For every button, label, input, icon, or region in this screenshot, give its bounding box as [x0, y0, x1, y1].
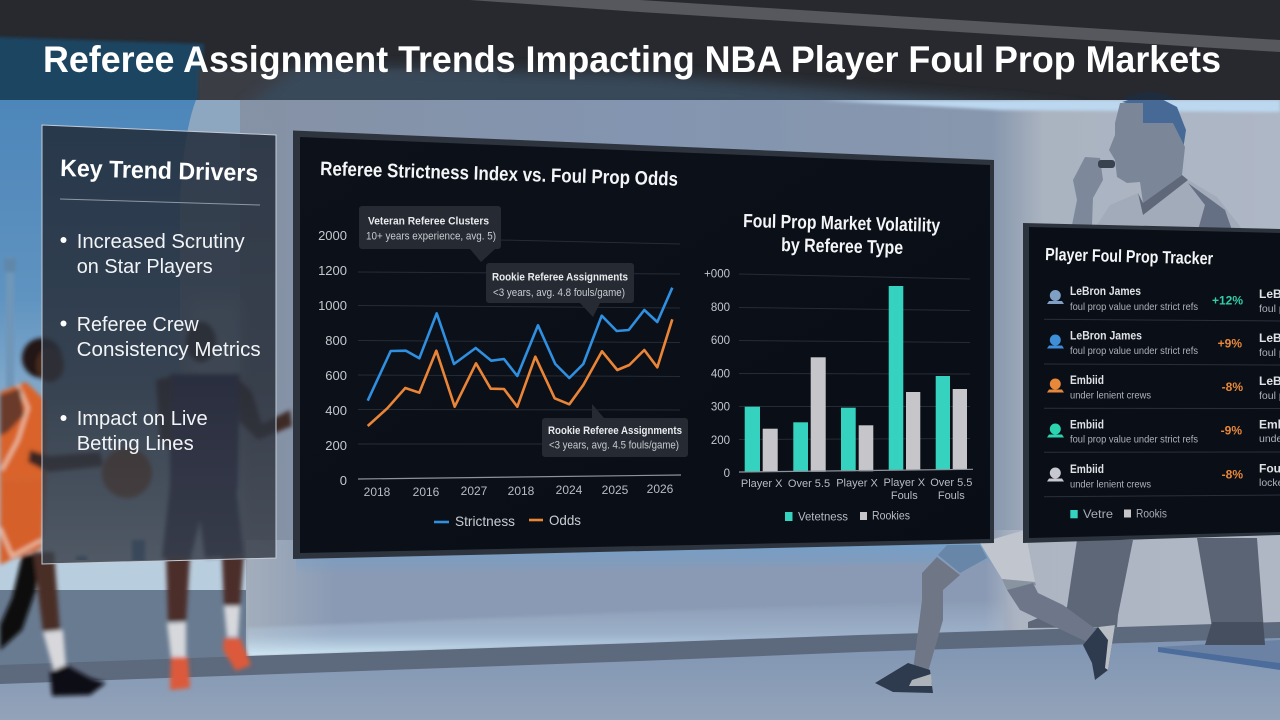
line chart: [318, 206, 688, 529]
heading: market volatility: [743, 211, 941, 259]
panel: main dashboard screen: [293, 130, 994, 559]
tracker legend: [1070, 506, 1167, 521]
bar chart: 600: [711, 335, 730, 347]
row: LeBron James +9%: [1047, 328, 1280, 359]
row: Embiid -8%: under lenient crews: [1070, 390, 1151, 402]
bullet: live betting: Betting Lines: [77, 432, 194, 455]
row: LeBron James +9%: LeBron James: [1070, 328, 1142, 342]
panel: key trend drivers: [42, 125, 276, 564]
row: LeBron James +12%: [1047, 284, 1280, 315]
bullet: live betting: Impact on Live: [77, 407, 208, 430]
bar chart: Over 5.5: [930, 477, 972, 489]
row: LeBron James +12%: foul prop value under strict refs: [1070, 301, 1198, 313]
callout: veteran referee clusters: Veteran Referee Clusters: [368, 216, 489, 228]
bar chart legend: Vetetness: [798, 510, 848, 524]
heading: market volatility: Foul Prop Market Volatility: [743, 211, 941, 237]
panel: player foul prop tracker: [1023, 223, 1280, 543]
line chart: 2026: [647, 482, 674, 496]
tracker legend: Vetre: [1083, 507, 1113, 521]
bullet: live betting: [60, 407, 208, 455]
title: Referee Assignment Trends Impacting NBA Player Foul Prop Markets: [43, 39, 1221, 80]
strictness line: [368, 288, 672, 401]
line chart: 1200: [318, 263, 347, 278]
bar chart: Over 5.5: [788, 478, 830, 490]
row: Embiid -8% second: -8%: [1222, 468, 1243, 482]
row: Embiid -8%: Embiid: [1070, 373, 1104, 387]
callout: rookie referee assignments upper: <3 years, avg. 4.8 fouls/game): [493, 287, 625, 299]
bar chart: 200: [711, 435, 730, 447]
bar chart: 400: [711, 368, 730, 380]
row: LeBron James +12%: +12%: [1212, 294, 1243, 308]
odds line: [368, 319, 672, 426]
row: Embiid -9%: [1047, 418, 1280, 446]
bar chart: [704, 268, 973, 524]
referee silhouette: [1028, 93, 1265, 645]
bar chart: 300: [711, 402, 730, 414]
bar chart: Player X: [836, 478, 878, 490]
header bar: [0, 0, 1280, 100]
line chart: 2024: [556, 483, 583, 497]
bar chart: Player X: [884, 477, 926, 489]
runner legs: [875, 530, 1115, 693]
line chart legend: [434, 512, 581, 529]
panel heading: Key Trend Drivers: [60, 155, 258, 187]
heading: market volatility: by Referee Type: [781, 235, 903, 259]
row: Embiid -9%: foul prop value under strict refs: [1070, 434, 1198, 446]
bullet: crew consistency: Referee Crew: [77, 313, 199, 336]
tracker heading: Player Foul Prop Tracker: [1045, 244, 1214, 268]
row: LeBron James +9%: foul prop value under strict refs: [1070, 345, 1198, 357]
bar chart legend: Rookies: [872, 508, 910, 522]
line chart: 400: [325, 403, 347, 418]
line chart: 600: [325, 368, 347, 383]
line chart legend: Odds: [549, 512, 581, 528]
line chart: 200: [325, 438, 347, 453]
bullet: crew consistency: [60, 313, 261, 361]
row: Embiid -9%: -9%: [1221, 424, 1242, 438]
basketball: [102, 448, 152, 498]
callout: veteran referee clusters: 10+ years experience, avg. 5): [366, 230, 496, 242]
line chart: 2027: [461, 484, 488, 498]
row: LeBron James +9%: +9%: [1218, 336, 1242, 350]
line chart: 2016: [413, 485, 440, 499]
line chart: 1000: [318, 298, 347, 313]
line chart: 0: [340, 473, 347, 488]
bar chart legend: [785, 508, 910, 524]
player: orange jersey: [0, 338, 106, 696]
callout: rookie referee assignments upper: [486, 263, 634, 317]
row: Embiid -8% second: under lenient crews: [1070, 478, 1151, 490]
bullet: crew consistency: Consistency Metrics: [77, 338, 261, 361]
bar chart: +000: [704, 268, 730, 280]
line chart: 2018: [508, 484, 535, 498]
line chart legend: Strictness: [455, 513, 515, 529]
line chart: 2025: [602, 483, 629, 497]
line chart: 800: [325, 333, 347, 348]
bullet: scrutiny: [60, 230, 245, 278]
row: Embiid -8%: -8%: [1222, 380, 1243, 394]
bullet: scrutiny: on Star Players: [77, 255, 213, 278]
callout: rookie referee assignments lower: <3 years, avg. 4.5 fouls/game): [549, 440, 679, 452]
heading: strictness vs odds: Referee Strictness Index vs. Foul Prop Odds: [320, 158, 678, 191]
player: purple jersey: [156, 322, 292, 690]
line chart: 2018: [364, 485, 391, 499]
bar chart: Fouls: [891, 490, 918, 502]
bar chart: Fouls: [938, 490, 965, 502]
bullet: scrutiny: Increased Scrutiny: [77, 230, 245, 253]
row: LeBron James +12%: LeBron James: [1070, 284, 1141, 298]
bar chart: 0: [724, 468, 730, 480]
callout: rookie referee assignments upper: Rookie Referee Assignments: [492, 272, 628, 284]
callout: rookie referee assignments lower: Rookie Referee Assignments: [548, 425, 682, 437]
tracker legend: Rookis: [1136, 506, 1167, 520]
callout: rookie referee assignments lower: [542, 404, 688, 457]
line chart: 2000: [318, 228, 347, 243]
row: Embiid -9%: Embiid: [1070, 418, 1104, 432]
callout: veteran referee clusters: [359, 206, 501, 262]
row: Embiid -8%: [1047, 373, 1280, 402]
bar chart: 800: [711, 302, 730, 314]
bar chart: Player X: [741, 478, 783, 490]
row: Embiid -8% second: Embiid: [1070, 462, 1104, 476]
row: Embiid -8% second: [1047, 462, 1280, 490]
